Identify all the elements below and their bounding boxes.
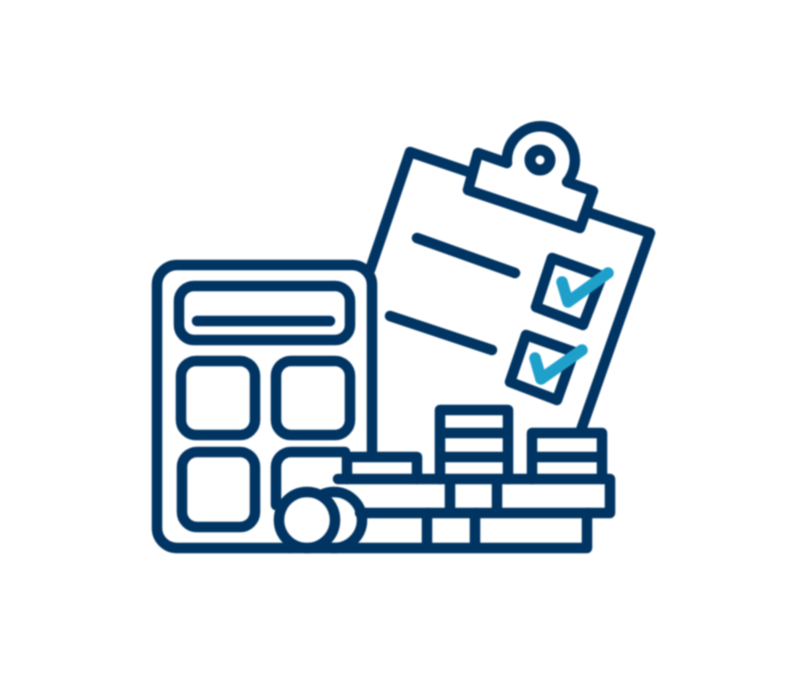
check mark 1 (562, 273, 608, 302)
clipboard (370, 126, 650, 430)
clip hole (530, 150, 550, 170)
display line (197, 316, 330, 326)
text line 2 (390, 316, 492, 350)
front coin (279, 492, 335, 548)
coin stacks (279, 410, 610, 548)
calculator (157, 265, 372, 548)
calculator body (157, 265, 372, 548)
back coin (306, 492, 362, 548)
right stack (532, 433, 602, 479)
clipboard clip (468, 126, 593, 228)
button 2 (276, 361, 350, 435)
upper row of coins (338, 479, 610, 513)
check mark 2 (535, 350, 582, 379)
middle stack (440, 410, 508, 479)
calculator display (179, 286, 350, 340)
button 4 (276, 452, 345, 505)
checkbox 2 (510, 335, 574, 400)
left small stack (347, 457, 417, 479)
checkbox 1 (536, 258, 602, 325)
button 3 (182, 452, 255, 527)
lower row of coins (290, 513, 587, 548)
button 1 (181, 361, 255, 435)
clipboard board outline (370, 152, 650, 430)
text line 1 (417, 238, 515, 273)
